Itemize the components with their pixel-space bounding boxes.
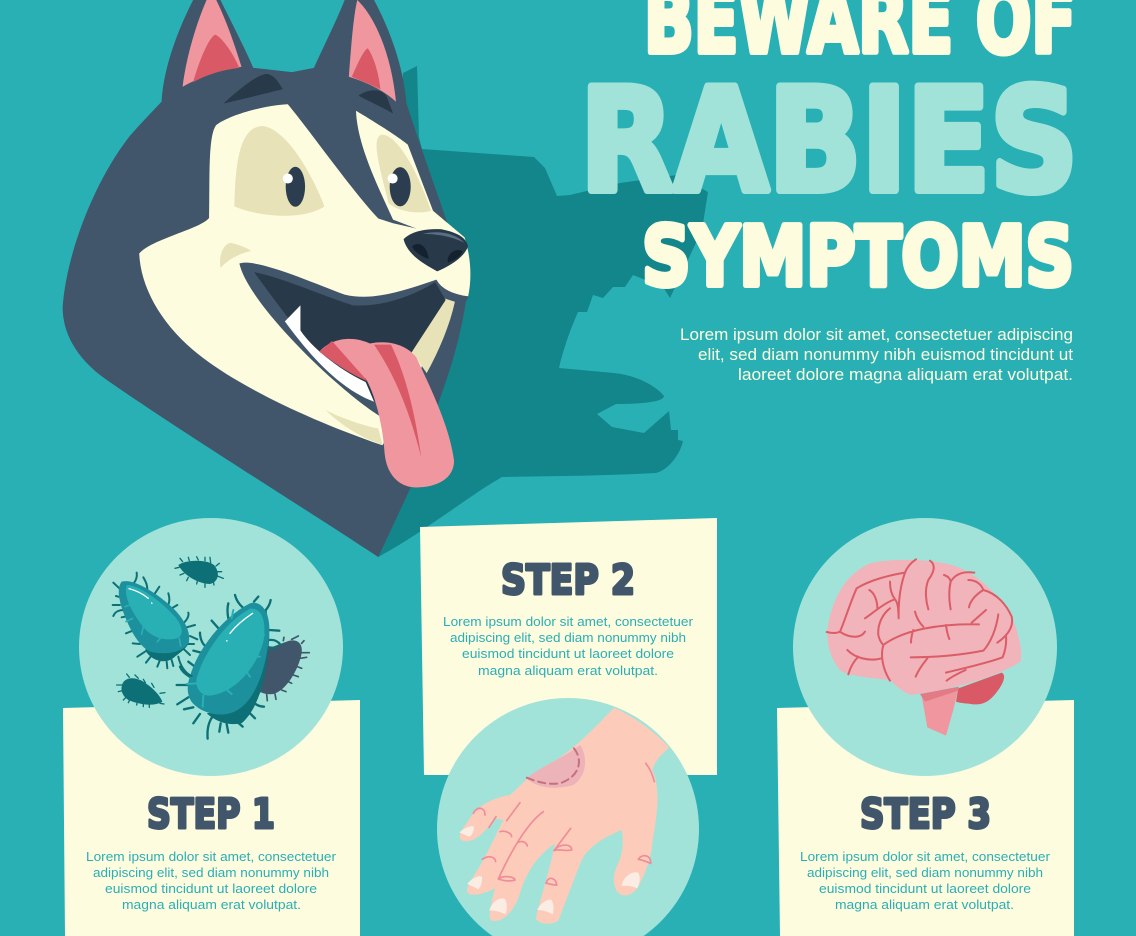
panel: step 3	[777, 518, 1074, 936]
icon: brain	[827, 559, 1021, 736]
title	[580, 0, 1078, 305]
step 3 text	[800, 849, 1051, 912]
step 2 text: euismod tincidunt ut laoreet dolore	[462, 646, 674, 661]
intro text: elit, sed diam nonummy nibh euismod tincidunt ut	[698, 346, 1073, 364]
panel: step 2	[420, 518, 717, 936]
dog shadow	[378, 66, 708, 557]
step 2 heading: STEP 2	[501, 556, 635, 604]
step 1 text: euismod tincidunt ut laoreet dolore	[105, 881, 317, 896]
panel: step 1	[63, 518, 360, 936]
step 1 heading: STEP 1	[147, 790, 275, 838]
step 2 text: magna aliquam erat volutpat.	[478, 663, 658, 678]
step 3 text: euismod tincidunt ut laoreet dolore	[819, 881, 1031, 896]
step 3 heading: STEP 3	[860, 790, 991, 838]
step 1 text: magna aliquam erat volutpat.	[122, 897, 301, 912]
step 3 text: magna aliquam erat volutpat.	[835, 897, 1014, 912]
step 3 text: Lorem ipsum dolor sit amet, consectetuer	[800, 849, 1051, 864]
icon: hand with bite wound	[459, 708, 669, 924]
step 1 text: adipiscing elit, sed diam nonummy nibh	[93, 865, 329, 880]
intro text: Lorem ipsum dolor sit amet, consectetuer adipiscing	[680, 326, 1073, 344]
icon: bacteria	[113, 557, 309, 739]
intro text	[680, 326, 1073, 384]
step 2 text	[443, 614, 694, 678]
step 2 text: Lorem ipsum dolor sit amet, consectetuer	[443, 614, 694, 629]
step 1 text	[86, 849, 337, 912]
intro text: laoreet dolore magna aliquam erat volutpat.	[738, 366, 1073, 384]
step 3 text: adipiscing elit, sed diam nonummy nibh	[807, 865, 1043, 880]
step 1 text: Lorem ipsum dolor sit amet, consectetuer	[86, 849, 337, 864]
dog head	[63, 0, 470, 557]
step 2 text: adipiscing elit, sed diam nonummy nibh	[450, 630, 686, 645]
